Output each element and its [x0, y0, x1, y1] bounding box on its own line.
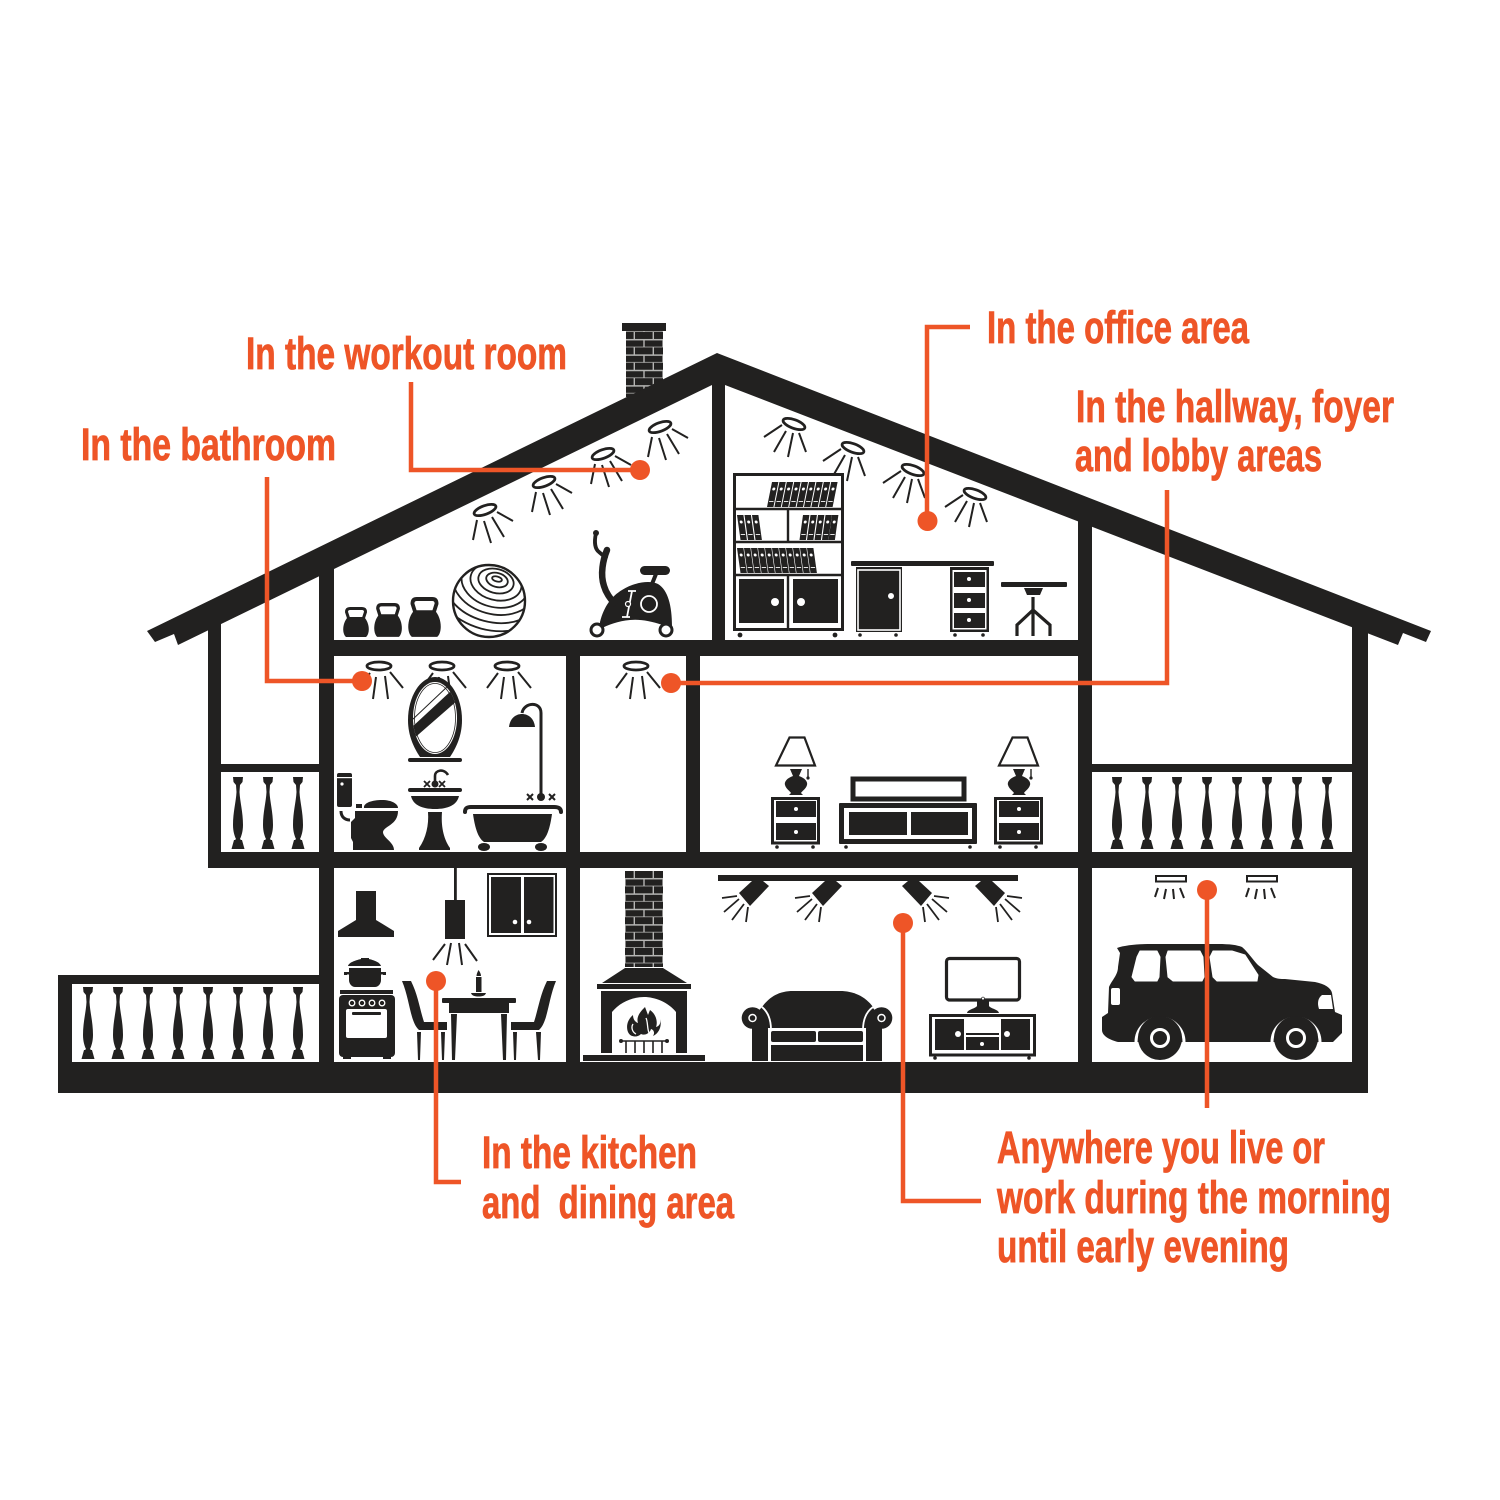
- connector: workout room: [411, 382, 650, 480]
- icon: exercise bike: [591, 530, 672, 636]
- ceiling lights: workout room: [473, 419, 688, 543]
- panel: hallway light: [616, 662, 660, 699]
- label: kitchen: and dining area: [482, 1177, 735, 1228]
- panel: fireplace: [583, 871, 705, 1061]
- icon: stool: [1001, 582, 1067, 636]
- icon: desk: [851, 561, 994, 637]
- connector: garage: [1197, 880, 1217, 1108]
- icon: sofa: [742, 991, 892, 1061]
- icon: wall cabinet: [488, 874, 556, 936]
- icon: stove: [339, 990, 395, 1059]
- ceiling lights: office: [764, 416, 987, 527]
- balusters: upper right balcony: [1110, 777, 1334, 849]
- house structure: roof and walls: [58, 353, 1431, 1093]
- icon: bathtub with shower: [465, 704, 561, 851]
- icon: bookshelf: [734, 474, 842, 637]
- label: anywhere: until early evening: [997, 1221, 1289, 1272]
- icon: television: [946, 958, 1020, 1013]
- icon: exercise ball: [452, 564, 526, 638]
- balusters: low left terrace: [82, 987, 304, 1059]
- connector: hallway: [661, 490, 1167, 693]
- icon: pendant lamp: [433, 868, 477, 965]
- connector: office: [918, 327, 970, 531]
- panel: living room: [718, 875, 1034, 1061]
- chimney on the roof: [622, 323, 666, 397]
- label: anywhere: [996, 1122, 1391, 1272]
- label: workout room: In the workout room: [246, 328, 567, 379]
- icon: left nightstand and lamp: [772, 738, 818, 849]
- connector: bathroom: [267, 477, 372, 691]
- panel: workout room: [343, 419, 688, 663]
- brick chimney breast: [625, 871, 663, 967]
- label: hallway: [1075, 381, 1394, 481]
- panel: kitchen and dining: [338, 868, 556, 1060]
- connector: living room: [893, 913, 981, 1201]
- label: hallway: and lobby areas: [1075, 430, 1322, 481]
- panel: bathroom: [337, 662, 561, 851]
- icon: washbasin: [408, 771, 462, 850]
- icon: pot: [344, 958, 386, 987]
- connector: kitchen: [426, 971, 461, 1182]
- icon: bed: [839, 779, 977, 849]
- ceiling lights: bathroom: [359, 662, 531, 699]
- label: anywhere: Anywhere you live or: [997, 1122, 1325, 1173]
- icon: kettlebells: [343, 599, 441, 637]
- label: hallway: In the hallway, foyer: [1076, 381, 1394, 432]
- label: bathroom: In the bathroom: [81, 419, 336, 470]
- roof: [147, 353, 1431, 645]
- icon: car: [1102, 944, 1342, 1060]
- panel: garage: [1102, 876, 1342, 1060]
- label: office: In the office area: [987, 302, 1250, 353]
- panel: office: [734, 416, 1067, 637]
- icon: toilet: [337, 773, 398, 850]
- label: kitchen: [482, 1127, 735, 1228]
- icon: dining table with candle and chairs: [402, 970, 556, 1060]
- icon: range hood: [338, 891, 394, 937]
- icon: tv console: [930, 1016, 1034, 1060]
- icon: mirror: [408, 677, 462, 762]
- panel: bedroom: [772, 738, 1042, 849]
- balusters: upper left balcony: [232, 777, 304, 849]
- label: kitchen: In the kitchen: [482, 1127, 697, 1178]
- track lighting: [718, 875, 1022, 922]
- icon: right nightstand and lamp: [996, 738, 1042, 849]
- icon: fireplace: [583, 968, 705, 1061]
- ceiling lights: garage: [1155, 876, 1277, 899]
